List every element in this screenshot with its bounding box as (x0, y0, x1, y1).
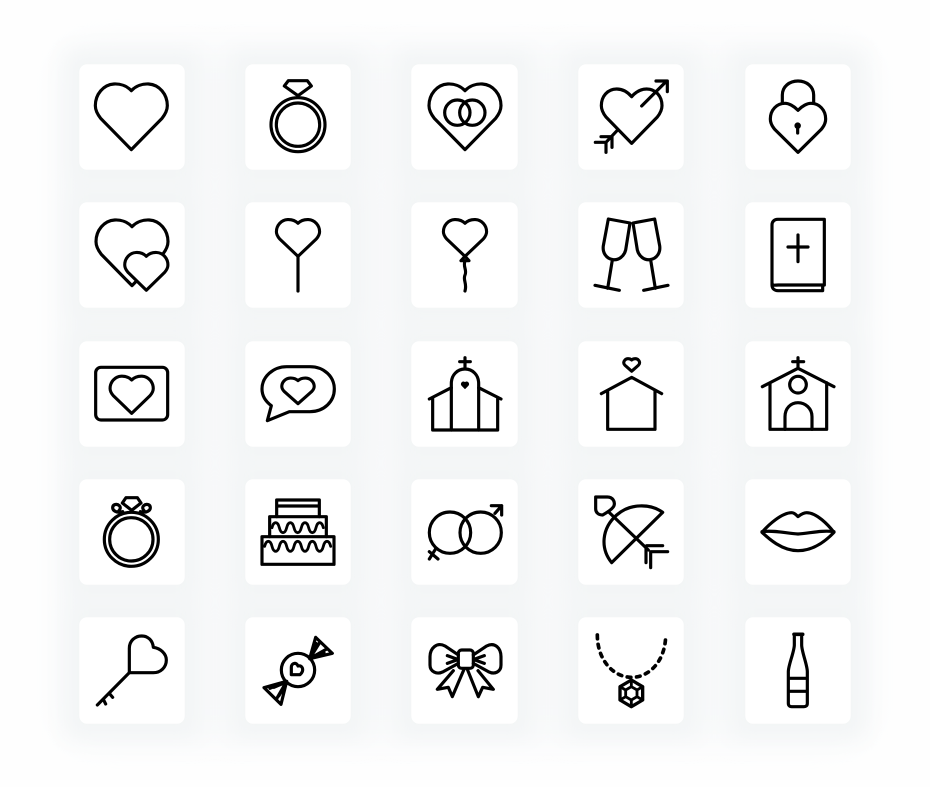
icon: house with heart (601, 359, 662, 429)
icon: heart with arrow (595, 81, 667, 152)
card: heart padlock (745, 64, 851, 170)
card: gem necklace (578, 617, 684, 724)
card: speech bubble with heart (245, 341, 351, 447)
card: two hearts (79, 202, 185, 308)
icon: heart balloon (443, 220, 487, 291)
icon: two hearts (96, 220, 168, 290)
card: bottle (745, 617, 851, 724)
card: gender symbols (411, 479, 518, 585)
card: house with heart (578, 341, 684, 447)
card: heart key (79, 617, 185, 724)
card: heart (79, 64, 185, 170)
card: wedding cake (245, 479, 351, 585)
icon: speech bubble with heart (262, 367, 334, 421)
icon: heart key (97, 636, 166, 705)
card: diamond ring (245, 64, 351, 170)
icon: wedding cake (262, 500, 334, 564)
card: bible (745, 202, 851, 308)
icon: heart padlock (770, 81, 826, 152)
icon: bow tie ribbon (430, 645, 501, 697)
icon: champagne glasses (595, 219, 668, 290)
card: heart balloon (411, 202, 518, 308)
card: champagne glasses (578, 202, 684, 308)
icon: bottle (788, 634, 807, 707)
card: bow and arrow (578, 479, 684, 585)
icon: gender symbols (429, 506, 502, 559)
card: church with heart (411, 341, 518, 447)
icon: heart (95, 84, 167, 150)
icon: heart card (96, 367, 168, 420)
icon: bow and arrow (596, 497, 668, 568)
card: bow tie ribbon (411, 617, 518, 724)
icon: diamond ring (271, 81, 325, 152)
card: lips (745, 479, 851, 585)
card: heart with arrow (578, 64, 684, 170)
icon: heart with rings (429, 84, 501, 150)
icon: ring with gem and ornaments (104, 498, 158, 566)
icon: gem necklace (597, 635, 666, 707)
icon: candy (264, 637, 332, 704)
icon: chapel (762, 358, 834, 429)
card: candy (245, 617, 351, 724)
card: heart card (79, 341, 185, 447)
card: ring with gem and ornaments (79, 479, 185, 585)
icon: church with heart (429, 358, 501, 430)
icon: heart lollipop (276, 220, 320, 291)
card: chapel (745, 341, 851, 447)
card: heart lollipop (245, 202, 351, 308)
card: heart with rings (411, 64, 518, 170)
icon: lips (762, 513, 834, 551)
icon: bible (772, 219, 824, 291)
